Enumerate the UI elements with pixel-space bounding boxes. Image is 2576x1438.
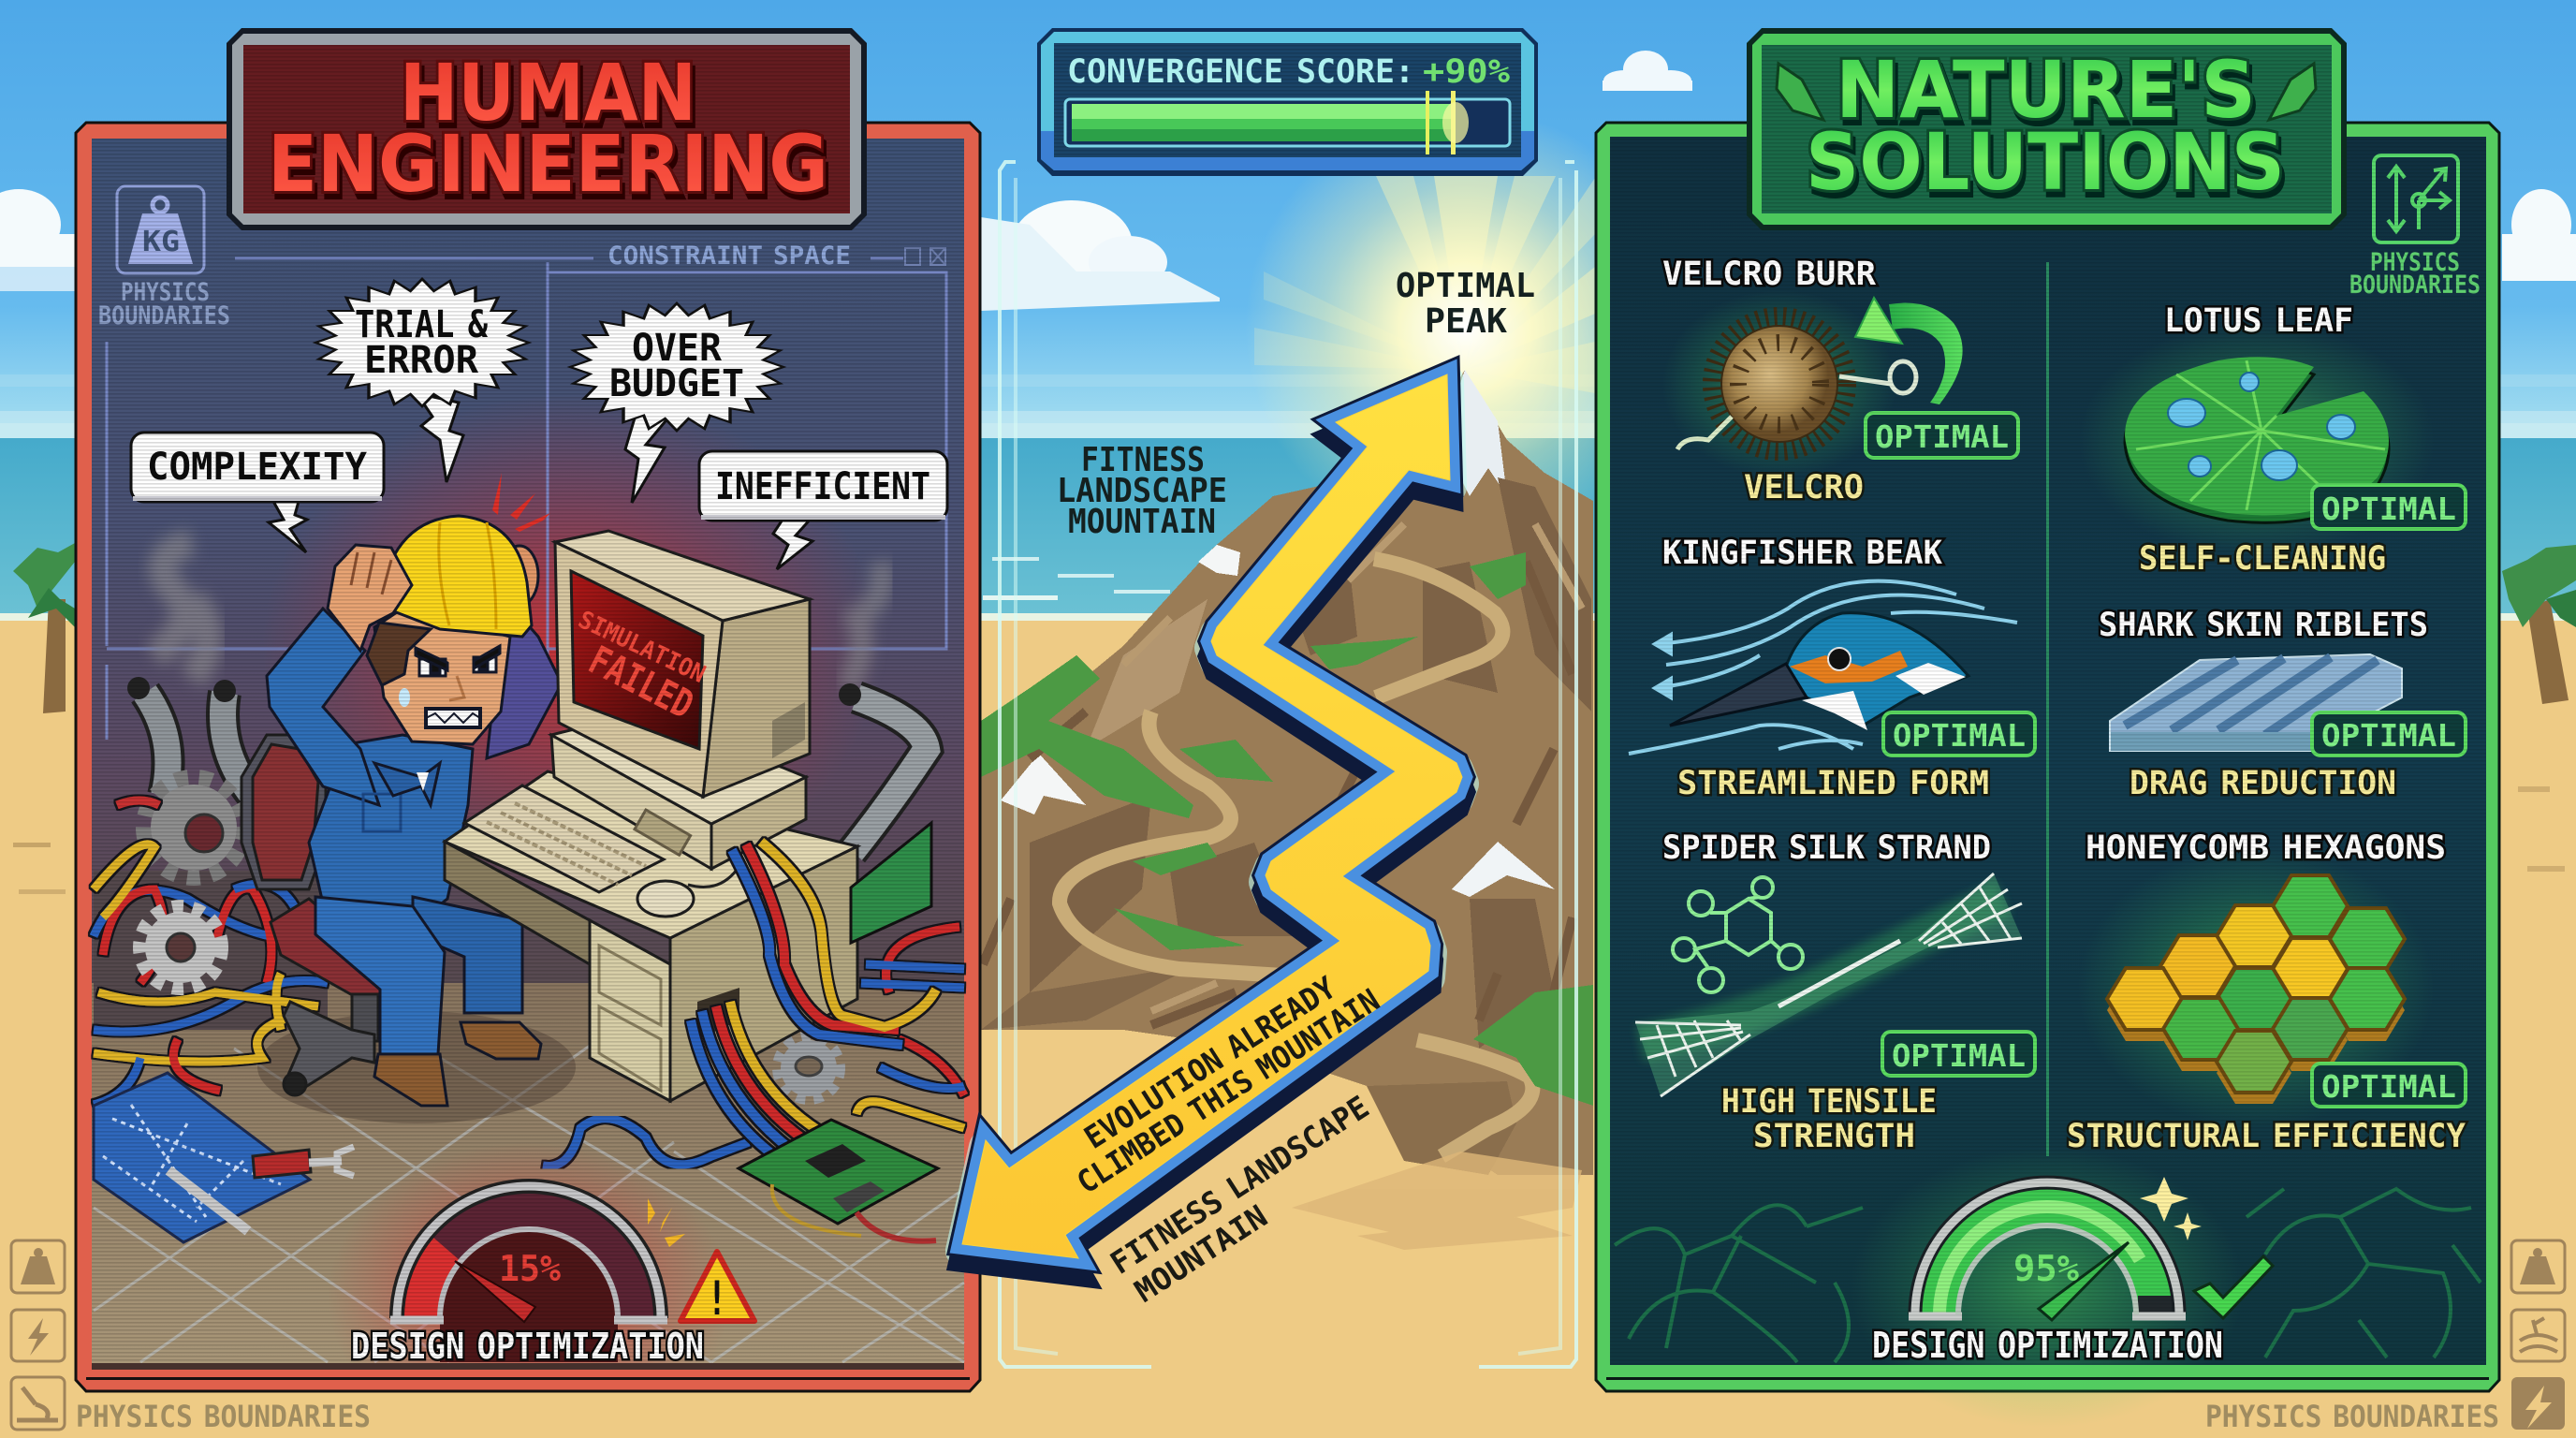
palm tree left	[13, 543, 75, 713]
dark interior	[1610, 137, 2486, 1365]
title: nature's solutions: SOLUTIONS	[1806, 116, 2285, 208]
velcro caption: VELCRO	[1744, 469, 1864, 506]
big yellow arrow	[962, 374, 1462, 1273]
optimal badge: OPTIMAL	[1892, 1037, 2026, 1074]
icon: side lightning left	[11, 1310, 65, 1361]
bird head	[1786, 613, 1969, 726]
centre divider	[2046, 262, 2049, 1156]
optimal peak label: OPTIMAL	[1396, 267, 1535, 305]
silk strand and webs	[1635, 873, 2022, 1096]
sand dunes below mountain	[1292, 1152, 1582, 1250]
mouse cord	[688, 866, 739, 888]
item: velcro burr	[1662, 256, 2018, 506]
smoke left	[154, 543, 208, 679]
background scene: sea	[0, 374, 2576, 621]
panel frame red	[76, 123, 980, 1391]
fitness landscape mountain label: MOUNTAIN	[1068, 503, 1216, 541]
honeycomb base	[2107, 979, 2405, 1104]
beak	[1670, 664, 1807, 726]
icon: side weight right	[2511, 1240, 2565, 1293]
panel floor	[92, 983, 964, 1363]
icon: side lightning right	[2511, 1377, 2565, 1430]
computer base	[551, 712, 806, 869]
title: human engineering: HUMAN	[400, 47, 696, 139]
optimal peak label	[1396, 267, 1535, 341]
icon: physics boundaries weight: KG	[142, 226, 180, 258]
background scene: beach	[0, 613, 2576, 1438]
sparkles	[2140, 1177, 2202, 1240]
root cracks bottom	[1615, 1189, 2481, 1362]
warning sparks	[648, 1198, 685, 1247]
near arm	[267, 609, 379, 805]
panel bottom rim green	[1606, 1377, 2489, 1380]
constraint space frame	[107, 258, 946, 740]
title: human engineering: ENGINEERING	[268, 118, 828, 210]
gauge rim	[397, 1186, 661, 1318]
gauge rim	[1915, 1182, 2179, 1314]
leaf edge	[2125, 364, 2389, 522]
molecule	[1673, 877, 1803, 992]
cloud left	[0, 189, 75, 291]
gauge needle	[455, 1261, 535, 1322]
near leg	[315, 897, 445, 1054]
bubble: inefficient	[699, 451, 947, 569]
icon: side microscope left	[11, 1377, 65, 1430]
velcro heading: VELCRO BURR	[1662, 256, 1877, 293]
office chair	[242, 735, 387, 1095]
arrow extrusion	[962, 389, 1462, 1273]
honeycomb caption: STRUCTURAL EFFICIENCY	[2067, 1118, 2466, 1155]
red glow around computer	[262, 393, 880, 899]
nose	[449, 676, 464, 700]
progress fill	[1072, 91, 1469, 154]
bubble: complexity: COMPLEXITY	[147, 446, 367, 489]
window buttons	[905, 248, 945, 265]
fitness landscape mountain	[981, 370, 1593, 1175]
cables right floor	[856, 927, 964, 1128]
arrow blue edge	[962, 374, 1462, 1258]
gauge red segment	[402, 1237, 461, 1318]
keyboard	[464, 785, 664, 892]
torso	[309, 735, 473, 927]
icon: physics boundaries weight	[117, 186, 204, 273]
spider heading: SPIDER SILK STRAND	[1662, 829, 1991, 867]
crt monitor	[555, 531, 810, 797]
gauge glow	[345, 1155, 704, 1363]
optimal peak label: PEAK	[1425, 302, 1507, 341]
bubble: over budget: OVER	[632, 327, 723, 370]
leaf surface	[2125, 357, 2389, 515]
gauge band	[402, 1192, 655, 1318]
arrow glow	[962, 381, 1462, 1265]
floor cable	[543, 1119, 749, 1167]
cable mess left background	[94, 871, 328, 1030]
optimal badge: OPTIMAL	[2321, 717, 2456, 754]
mountain winding paths	[1060, 559, 1532, 1156]
item: spider silk strand	[1635, 829, 2035, 1155]
screen text simulation failed: FAILED	[581, 637, 701, 727]
panel bottom rim	[86, 1363, 970, 1380]
sun burst behind optimal peak	[1245, 108, 1685, 548]
spider caption	[1721, 1083, 1937, 1155]
scanlines right	[1610, 137, 2486, 1365]
fibre strand	[1677, 417, 1732, 449]
gauge value: 95%	[2013, 1248, 2079, 1289]
arrow text: CLIMBED THIS MOUNTAIN	[1070, 981, 1386, 1201]
panel: nature's solutions	[1596, 123, 2499, 1428]
physics boundaries label left	[98, 278, 230, 330]
burr body	[1721, 326, 1837, 442]
airflow lines	[1629, 581, 2017, 754]
engineer figure	[267, 516, 562, 1106]
fitness landscape mountain label	[1057, 441, 1227, 541]
boots	[461, 1022, 541, 1059]
riblet plate	[2110, 654, 2402, 751]
bubble: inefficient: INEFFICIENT	[715, 465, 930, 508]
fitness landscape rotated label: FITNESS LANDSCAPE	[1104, 1089, 1375, 1282]
honeycomb glow	[2078, 847, 2434, 1128]
fitness landscape mountain label: FITNESS	[1081, 441, 1205, 479]
bubble: trial and error	[315, 279, 529, 482]
smoke right	[847, 562, 882, 688]
bubble: trial and error: TRIAL &	[355, 303, 489, 346]
icon: check mark	[2194, 1256, 2273, 1318]
eyes	[419, 659, 446, 676]
chair shadow	[257, 1011, 576, 1123]
optimal badge: OPTIMAL	[2321, 1068, 2456, 1105]
cables draped over desk	[691, 842, 936, 1159]
kingfisher caption: STREAMLINED FORM	[1677, 765, 1989, 802]
item: kingfisher beak	[1629, 535, 2035, 802]
water droplets	[2168, 373, 2355, 480]
shark caption: DRAG REDUCTION	[2130, 765, 2396, 802]
gauge dark tip	[2138, 1296, 2173, 1316]
web lines	[1635, 873, 2022, 1096]
icon: leaf left	[1777, 64, 1823, 120]
title: nature's solutions: NATURE'S	[1836, 44, 2256, 136]
palm tree right	[2502, 545, 2576, 704]
cloud far right	[2502, 189, 2576, 281]
wrench	[168, 1170, 248, 1231]
icon: side weight left	[11, 1240, 65, 1293]
background scene: sky	[0, 0, 2576, 438]
gear top	[143, 777, 244, 878]
near hand	[328, 545, 412, 651]
upright circuit board	[851, 823, 931, 943]
title: nature's solutions	[1747, 28, 2347, 230]
icon: side plant right	[2511, 1310, 2565, 1361]
panel wall background	[92, 139, 964, 990]
screen text simulation failed: SIMULATION	[574, 606, 710, 689]
bubble: complexity	[131, 433, 384, 552]
score value: +90%	[1423, 53, 1510, 91]
floor circuit board	[739, 1120, 938, 1241]
burr glow	[1662, 290, 1896, 477]
scanlines left	[92, 139, 964, 1363]
arrow text: EVOLUTION ALREADY	[1077, 969, 1342, 1156]
shark heading: SHARK SKIN RIBLETS	[2099, 607, 2428, 644]
desk	[445, 771, 857, 1101]
gauge highlight	[1939, 1207, 2155, 1314]
gauge label: DESIGN OPTIMIZATION	[351, 1326, 704, 1367]
head	[374, 609, 510, 744]
mountain vegetation	[981, 552, 1593, 1106]
floor grid	[94, 1039, 964, 1362]
cloud right top	[1603, 51, 1692, 91]
spider caption: STRENGTH	[1753, 1118, 1915, 1155]
fitness landscape mountain label: LANDSCAPE	[1057, 472, 1227, 510]
pockets and collar	[363, 794, 401, 831]
blueprint	[94, 1073, 310, 1242]
burr hook marks	[1738, 343, 1821, 425]
bird white patch	[1895, 663, 1966, 695]
hair	[367, 623, 431, 685]
helmet	[380, 516, 532, 637]
leaf veins	[2136, 360, 2385, 510]
arrow body	[962, 374, 1462, 1258]
spider caption: HIGH TENSILE	[1721, 1083, 1937, 1121]
item: honeycomb hexagons	[2067, 829, 2466, 1155]
physics boundaries label left: PHYSICS	[121, 278, 210, 307]
item: shark skin riblets	[2099, 607, 2466, 802]
eyebrows	[416, 648, 447, 670]
lotus glow	[2079, 323, 2435, 557]
icon: warning triangle	[681, 1252, 754, 1326]
constraint space label: CONSTRAINT SPACE	[607, 242, 851, 271]
bird white throat	[1802, 691, 1867, 730]
score label: CONVERGENCE SCORE:	[1067, 53, 1414, 91]
icon: warning triangle: !	[707, 1271, 727, 1326]
gear lower	[139, 906, 222, 989]
far leg	[413, 897, 522, 1013]
curved green arrow	[1889, 303, 1963, 404]
riblet front	[2111, 732, 2312, 751]
physics boundaries bottom left: PHYSICS BOUNDARIES	[76, 1399, 371, 1434]
bird orange cheek	[1790, 651, 1908, 683]
optimal badge	[1866, 413, 2018, 458]
mouse	[637, 881, 694, 917]
gauge: design optimization 95%	[1851, 1147, 2273, 1428]
glass frame around centre	[1000, 162, 1576, 1367]
convergence score panel	[1037, 28, 1538, 176]
far hand	[501, 546, 538, 606]
arrow outline	[962, 374, 1462, 1258]
arrow head	[1855, 298, 1902, 344]
silk strand glow	[1640, 899, 2003, 1044]
honeycomb cells	[2107, 875, 2405, 1093]
burr spikes	[1716, 320, 1843, 448]
physics boundaries label right: PHYSICS	[2370, 248, 2460, 277]
title: human engineering	[227, 28, 867, 230]
gauge band	[1921, 1188, 2174, 1314]
honeycomb heading: HONEYCOMB HEXAGONS	[2086, 829, 2446, 867]
lotus caption: SELF-CLEANING	[2139, 540, 2386, 578]
stress marks	[492, 473, 550, 532]
hook loop	[1839, 361, 1916, 393]
kingfisher heading: KINGFISHER BEAK	[1662, 535, 1942, 572]
physics boundaries label right	[2349, 248, 2481, 300]
progress track	[1065, 99, 1510, 146]
bubble: trial and error: ERROR	[364, 339, 479, 382]
gauge: design optimization 15%	[345, 1155, 757, 1363]
panel: human engineering	[76, 123, 980, 1438]
cloud centre	[981, 200, 1220, 311]
gauge glow	[1851, 1147, 2244, 1428]
fitness landscape rotated label: MOUNTAIN	[1128, 1197, 1274, 1310]
optimal badge: OPTIMAL	[2321, 491, 2456, 527]
optimal badge: OPTIMAL	[1893, 717, 2026, 754]
broken pipes	[127, 677, 927, 852]
gauge label: DESIGN OPTIMIZATION	[1872, 1325, 2223, 1366]
physics boundaries bottom right: PHYSICS BOUNDARIES	[2205, 1399, 2499, 1434]
mouth	[426, 709, 480, 727]
wires gear on floor	[777, 1036, 841, 1100]
physics boundaries label right: BOUNDARIES	[2349, 271, 2481, 300]
tangled cables left	[94, 800, 328, 1105]
lotus heading: LOTUS LEAF	[2164, 302, 2353, 340]
optimal badge: OPTIMAL	[1875, 418, 2009, 455]
gauge value: 15%	[499, 1248, 561, 1289]
item: lotus leaf	[2079, 302, 2466, 578]
icon: physics boundaries arrows	[2374, 155, 2458, 242]
bubble: over budget: BUDGET	[609, 362, 744, 405]
gauge needle	[2039, 1242, 2129, 1320]
bubble: over budget	[570, 303, 783, 503]
sweat	[399, 688, 410, 707]
eye	[1828, 648, 1851, 670]
icon: leaf right	[2269, 64, 2316, 120]
green frame	[1596, 123, 2499, 1391]
screwdriver	[253, 1147, 354, 1178]
gauge interior	[440, 1229, 618, 1362]
screen text simulation failed	[574, 606, 710, 727]
physics boundaries label left: BOUNDARIES	[98, 301, 230, 330]
riblet ridges	[2125, 657, 2378, 735]
far arm behind head	[487, 599, 562, 758]
